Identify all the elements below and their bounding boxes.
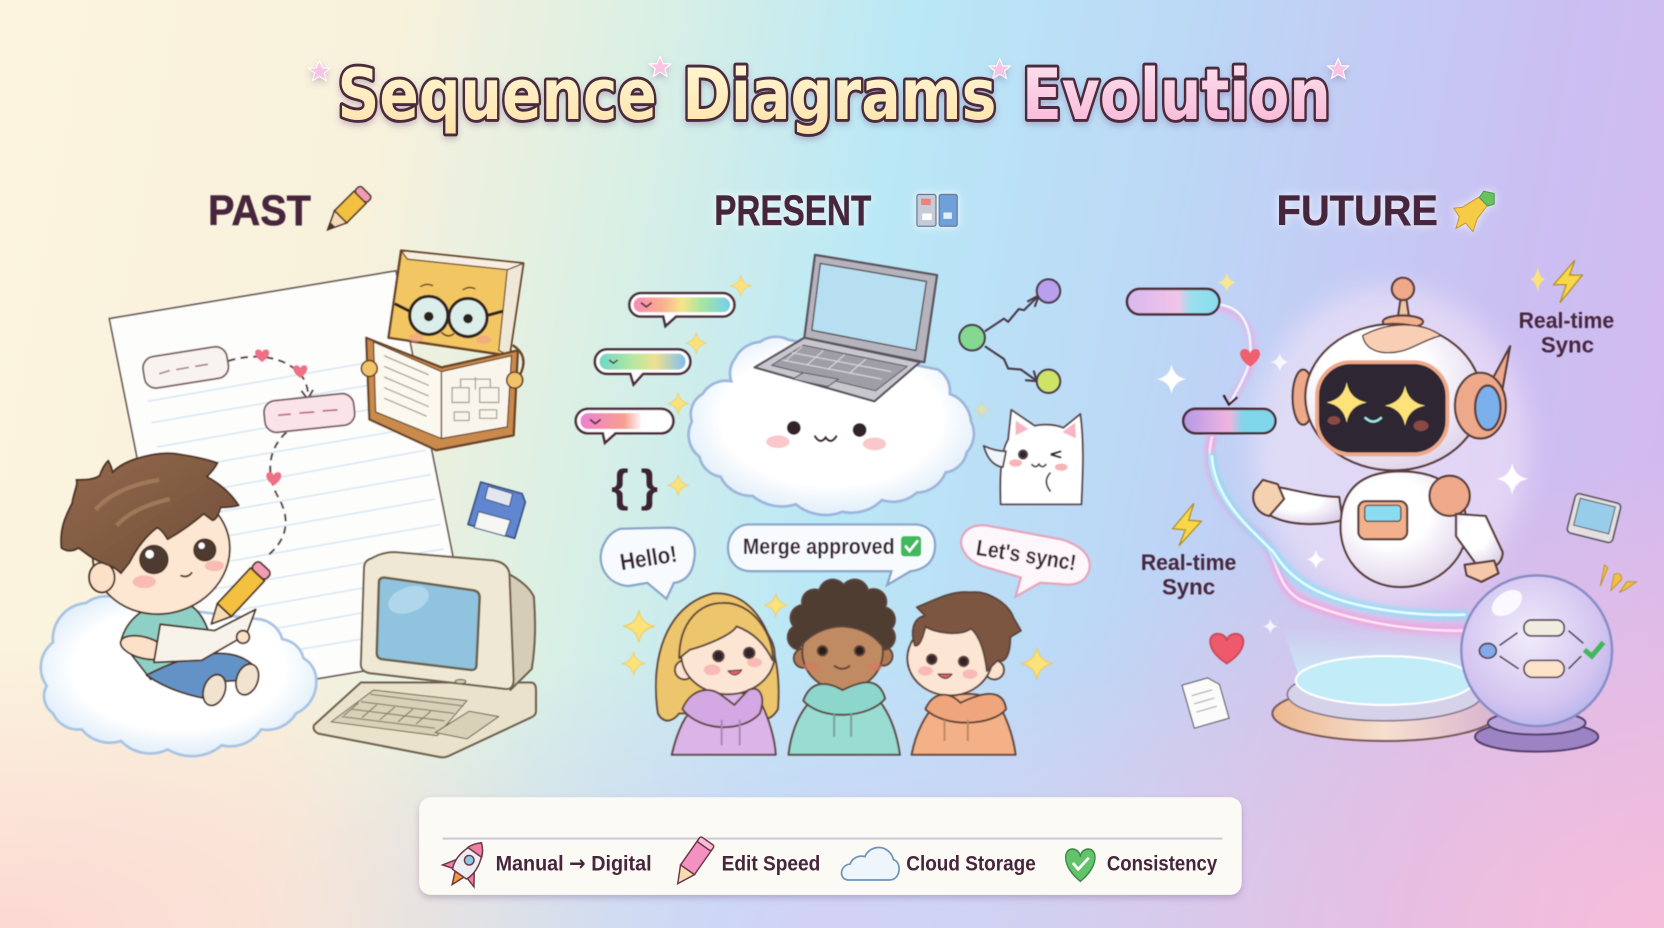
panel: past [41, 251, 536, 757]
branching network icon [959, 279, 1060, 393]
blush [133, 575, 156, 588]
star eyes [1327, 382, 1425, 426]
icon: pencil [322, 185, 372, 236]
legend item: consistency [1066, 849, 1217, 881]
heart 2 [293, 365, 307, 378]
caption: Real-time Sync left [1141, 550, 1236, 600]
icon: bolt left [1173, 503, 1201, 546]
boy with pencil [61, 453, 272, 709]
sparkles [1157, 266, 1545, 634]
visor [1317, 362, 1448, 454]
robot left arm [1253, 480, 1342, 524]
pencil [204, 560, 272, 631]
robot right arm [1429, 476, 1503, 582]
icon: tablet [1566, 493, 1621, 543]
head crown [1363, 325, 1441, 353]
orange hood [925, 694, 1006, 723]
speech bubble: Let's sync [961, 525, 1090, 597]
keyboard base [314, 683, 536, 757]
shirt [121, 601, 210, 679]
right headphone [1455, 373, 1506, 439]
panel: legend bar [419, 797, 1242, 896]
icon: bolt right [1554, 260, 1582, 303]
caption line 2: Sync [1541, 333, 1594, 358]
open book [366, 338, 518, 450]
chat bar 1 [629, 293, 734, 326]
eyes [140, 546, 168, 573]
hair [61, 453, 239, 573]
icon: split panels [917, 194, 957, 226]
glasses [395, 296, 503, 337]
panel: future [1127, 260, 1636, 752]
legend item: cloud storage [842, 847, 1036, 880]
robot glow [1252, 287, 1528, 605]
box two [263, 392, 356, 434]
glass sphere [1461, 575, 1612, 726]
legend background [419, 797, 1242, 895]
arm [118, 631, 169, 664]
speech bubble: Merge approved [728, 524, 935, 585]
head [1305, 324, 1481, 470]
gradient bar 2 [1183, 409, 1276, 433]
legend item: edit speed [671, 836, 820, 889]
cloud seat [41, 596, 316, 756]
icon: shooting star [1454, 191, 1494, 232]
heart on trail [1240, 349, 1260, 367]
title star 2 [649, 56, 671, 76]
label: Manual → Digital [496, 851, 652, 876]
robot body [1340, 471, 1467, 587]
cloud face [766, 421, 886, 450]
face [79, 475, 244, 629]
box one [141, 345, 230, 390]
retro computer [314, 552, 536, 757]
heading: PRESENT [714, 187, 957, 234]
label: Cloud Storage [906, 852, 1036, 875]
chat bar 3 [576, 409, 673, 443]
heading: PAST [208, 185, 372, 236]
girl hood [682, 689, 762, 727]
check mark badge [901, 536, 921, 556]
icon: cloud [842, 847, 899, 880]
legend item: manual to digital [437, 832, 652, 896]
heading text FUTURE: FUTURE [1277, 187, 1438, 234]
title word: Evolution: Evolution [1022, 54, 1331, 136]
gradient bar 1 [1127, 289, 1219, 314]
cat [984, 410, 1083, 504]
sparkles [622, 275, 1053, 679]
title star 3 [989, 59, 1010, 78]
heading text PAST: PAST [208, 187, 311, 234]
small book [154, 609, 256, 662]
icon: floppy disk [468, 482, 525, 538]
title word: Diagrams: Diagrams [682, 54, 996, 136]
jeans [146, 653, 255, 701]
caption line 1: Real-time [1519, 308, 1614, 333]
icon: green heart [1066, 849, 1095, 881]
book hands [361, 361, 377, 376]
chat bar 2 [595, 349, 690, 384]
ball check [1584, 642, 1604, 656]
ball diagram [1479, 620, 1583, 677]
left ear [1293, 370, 1314, 425]
robot cheeks [1328, 416, 1428, 431]
title word: Sequence: Sequence [337, 54, 657, 136]
antenna [1383, 278, 1423, 328]
heading text PRESENT: PRESENT [714, 187, 871, 234]
speech bubble: Let's sync: Let's sync! [974, 535, 1078, 575]
heart 1 [255, 349, 269, 362]
speech bubble: Merge approved: Merge approved [743, 534, 895, 559]
monitor [488, 565, 535, 690]
boy hair [913, 592, 1021, 671]
ear [89, 563, 115, 592]
icon: rocket [437, 832, 497, 896]
speech bubble: Hello: Hello! [618, 541, 679, 575]
teal hood [803, 682, 885, 715]
title star 1 [309, 61, 330, 80]
icon: pink pencil [671, 836, 715, 889]
sheet of lined paper [109, 271, 472, 701]
kid: girl in purple hoodie [656, 593, 779, 755]
mouth [180, 572, 192, 576]
icon: document [1182, 675, 1229, 728]
speech bubble: Hello [601, 528, 695, 599]
code braces: { } [611, 462, 658, 511]
curly hair [788, 580, 895, 650]
divider line [443, 838, 1223, 840]
left caption line 1: Real-time [1141, 550, 1236, 575]
title star 4 [1328, 59, 1349, 78]
kid: boy in teal hoodie [788, 580, 900, 755]
panel: present [576, 255, 1090, 755]
book character [361, 251, 523, 450]
dashed arrow top [228, 357, 308, 397]
label: Consistency [1107, 852, 1217, 875]
shoes [199, 671, 230, 709]
icon: red heart [1210, 634, 1243, 664]
caption: Real-time Sync right [1519, 308, 1614, 358]
heading: FUTURE [1277, 187, 1494, 234]
right ear spike [1488, 346, 1510, 412]
holographic platform [1272, 626, 1497, 741]
small yellow marks [1600, 565, 1636, 592]
crystal ball [1461, 575, 1612, 752]
dashed arrow bottom [265, 432, 287, 557]
label: Edit Speed [722, 852, 820, 875]
cloud character [689, 337, 974, 515]
chest panel [1358, 501, 1407, 539]
title [309, 54, 1349, 136]
kid: boy in orange hoodie [907, 592, 1021, 755]
robot [1253, 278, 1510, 587]
ball stand [1475, 711, 1598, 752]
left caption line 2: Sync [1162, 575, 1215, 600]
hand drawn sequence diagram [141, 345, 356, 557]
smile [1365, 417, 1382, 422]
laptop [755, 255, 937, 401]
icon check [1073, 858, 1089, 869]
glowing rainbow trail [1210, 305, 1464, 631]
heart 3 [266, 472, 281, 486]
arrow head [1224, 395, 1237, 405]
